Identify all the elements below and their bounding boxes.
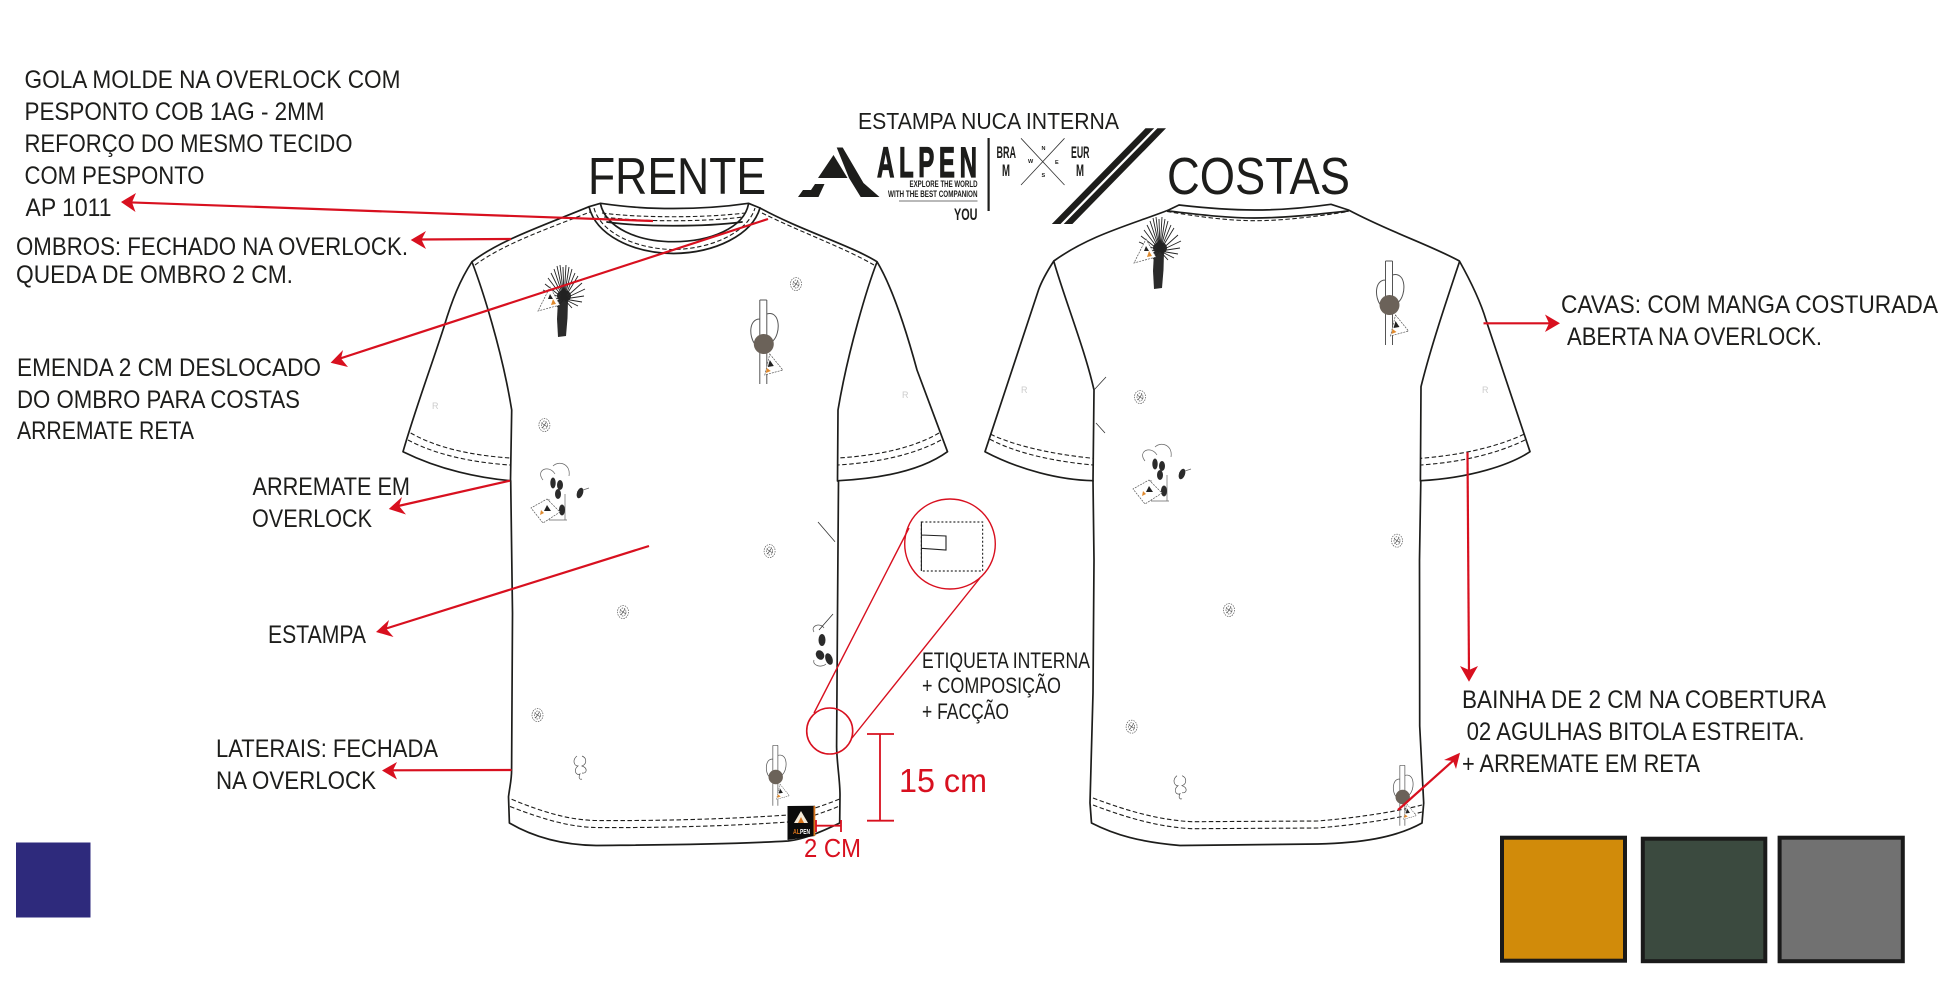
arrow: overlock [389, 481, 510, 514]
shoulder stitching [475, 212, 590, 265]
print motifs front: R [902, 390, 909, 400]
sleeve hem stitching [411, 433, 510, 458]
text: print note: ESTAMPA [268, 621, 366, 649]
heading: construction note collar: GOLA MOLDE NA OVERLOCK COM [24, 66, 400, 94]
text: inner label note [922, 648, 1090, 724]
brand tag on hem [788, 806, 815, 840]
left armhole [472, 262, 512, 481]
text: armhole note: ABERTA NA OVERLOCK. [1567, 323, 1822, 351]
text: hem note [1462, 686, 1826, 778]
arrow: shoulders [411, 231, 511, 249]
logo: Alpen neck label: M [1076, 162, 1084, 180]
left armhole [1054, 262, 1094, 481]
arrow: seam [331, 219, 768, 367]
text: seam note [17, 354, 321, 445]
swatch: blue [16, 842, 90, 918]
swatch: mustard [1502, 838, 1625, 961]
print motifs back [1021, 217, 1489, 826]
heading: inner neck print: ESTAMPA NUCA INTERNA [858, 108, 1119, 134]
text: hem note: 02 AGULHAS BITOLA ESTREITA. [1467, 718, 1805, 746]
text: shoulders note [16, 233, 408, 289]
text: shoulders note: OMBROS: FECHADO NA OVERLOCK. [16, 233, 408, 261]
dimension: 2 cm: 2 CM [804, 833, 861, 863]
print motifs front: R [432, 401, 439, 411]
heading: construction note collar: PESPONTO COB 1AG - 2MM [24, 98, 324, 126]
text: inner label note: + FACÇÃO [922, 699, 1009, 724]
logo: Alpen neck label: M [1002, 162, 1010, 180]
icon: mountain mark [798, 148, 880, 197]
back body outline [985, 204, 1530, 846]
arrow: body hem [1398, 753, 1460, 810]
arrow: sleeve hem [1460, 452, 1478, 682]
print motifs front [432, 265, 909, 806]
brand tag on hem: PEN [800, 829, 810, 836]
logo: Alpen neck label: EUR [1071, 144, 1090, 162]
inset: inner label zoom circle [807, 499, 995, 754]
back neck seam [1168, 211, 1348, 218]
logo: Alpen neck label: N [1042, 146, 1046, 152]
text: overlock finish note: OVERLOCK [252, 505, 372, 533]
logo: Alpen neck label: S [1042, 173, 1046, 179]
t-shirt back flat sketch [985, 204, 1530, 846]
logo: Alpen neck label [798, 128, 1166, 224]
text: seam note: ARREMATE RETA [17, 417, 194, 445]
heading: construction note collar: COM PESPONTO [24, 162, 204, 190]
text: inner label note: ETIQUETA INTERNA [922, 648, 1090, 673]
text: side seams note: NA OVERLOCK [216, 767, 376, 795]
text: overlock finish note [252, 473, 410, 533]
logo text: ALPEN [877, 139, 977, 187]
front body outline [403, 203, 948, 846]
text: side seams note [216, 735, 438, 795]
logo: Alpen neck label: BRA [996, 144, 1016, 162]
dimension: 15 cm [867, 734, 987, 821]
heading: front: FRENTE [588, 148, 766, 206]
body hem stitching [1093, 798, 1422, 822]
heading: construction note collar: AP 1011 [26, 194, 112, 222]
print motifs back: R [1021, 385, 1028, 395]
dimension: 2 cm [804, 820, 861, 863]
arrow: armhole [1484, 314, 1560, 332]
text: side seams note: LATERAIS: FECHADA [216, 735, 438, 763]
heading: construction note collar [24, 66, 400, 222]
body hem stitching [512, 799, 840, 821]
heading: back: COSTAS [1167, 148, 1350, 206]
t-shirt front flat sketch [403, 203, 948, 846]
logo: Alpen neck label: WITH THE BEST COMPANION [888, 189, 978, 200]
sleeve hem stitching [991, 434, 1093, 458]
arrow: collar [121, 193, 653, 221]
brand tag on hem: AL [793, 829, 801, 836]
swatch: dark green [1643, 839, 1765, 961]
print motifs back: R [1482, 385, 1489, 395]
arrow: print [376, 546, 649, 637]
right armhole [1420, 262, 1459, 481]
text: hem note: BAINHA DE 2 CM NA COBERTURA [1462, 686, 1826, 714]
heading: construction note collar: REFORÇO DO MESMO TECIDO [24, 130, 352, 158]
text: seam note: EMENDA 2 CM DESLOCADO [17, 354, 321, 382]
swatch: grey [1780, 838, 1903, 961]
icon: diagonal stripes [1052, 128, 1166, 224]
arrow: side seams [382, 762, 512, 780]
text: shoulders note: QUEDA DE OMBRO 2 CM. [16, 261, 293, 289]
dimension: 15 cm: 15 cm [899, 762, 987, 799]
right armhole [838, 262, 877, 481]
collar [589, 207, 760, 254]
logo: Alpen neck label: EXPLORE THE WORLD [910, 179, 978, 190]
text: inner label note: + COMPOSIÇÃO [922, 673, 1061, 698]
logo: Alpen neck label: YOU [954, 205, 978, 224]
text: armhole note [1561, 291, 1938, 351]
logo: Alpen neck label: E [1055, 160, 1059, 166]
text: seam note: DO OMBRO PARA COSTAS [17, 386, 300, 414]
logo: Alpen neck label: W [1028, 159, 1034, 165]
text: overlock finish note: ARREMATE EM [252, 473, 410, 501]
text: hem note: + ARREMATE EM RETA [1462, 750, 1700, 778]
